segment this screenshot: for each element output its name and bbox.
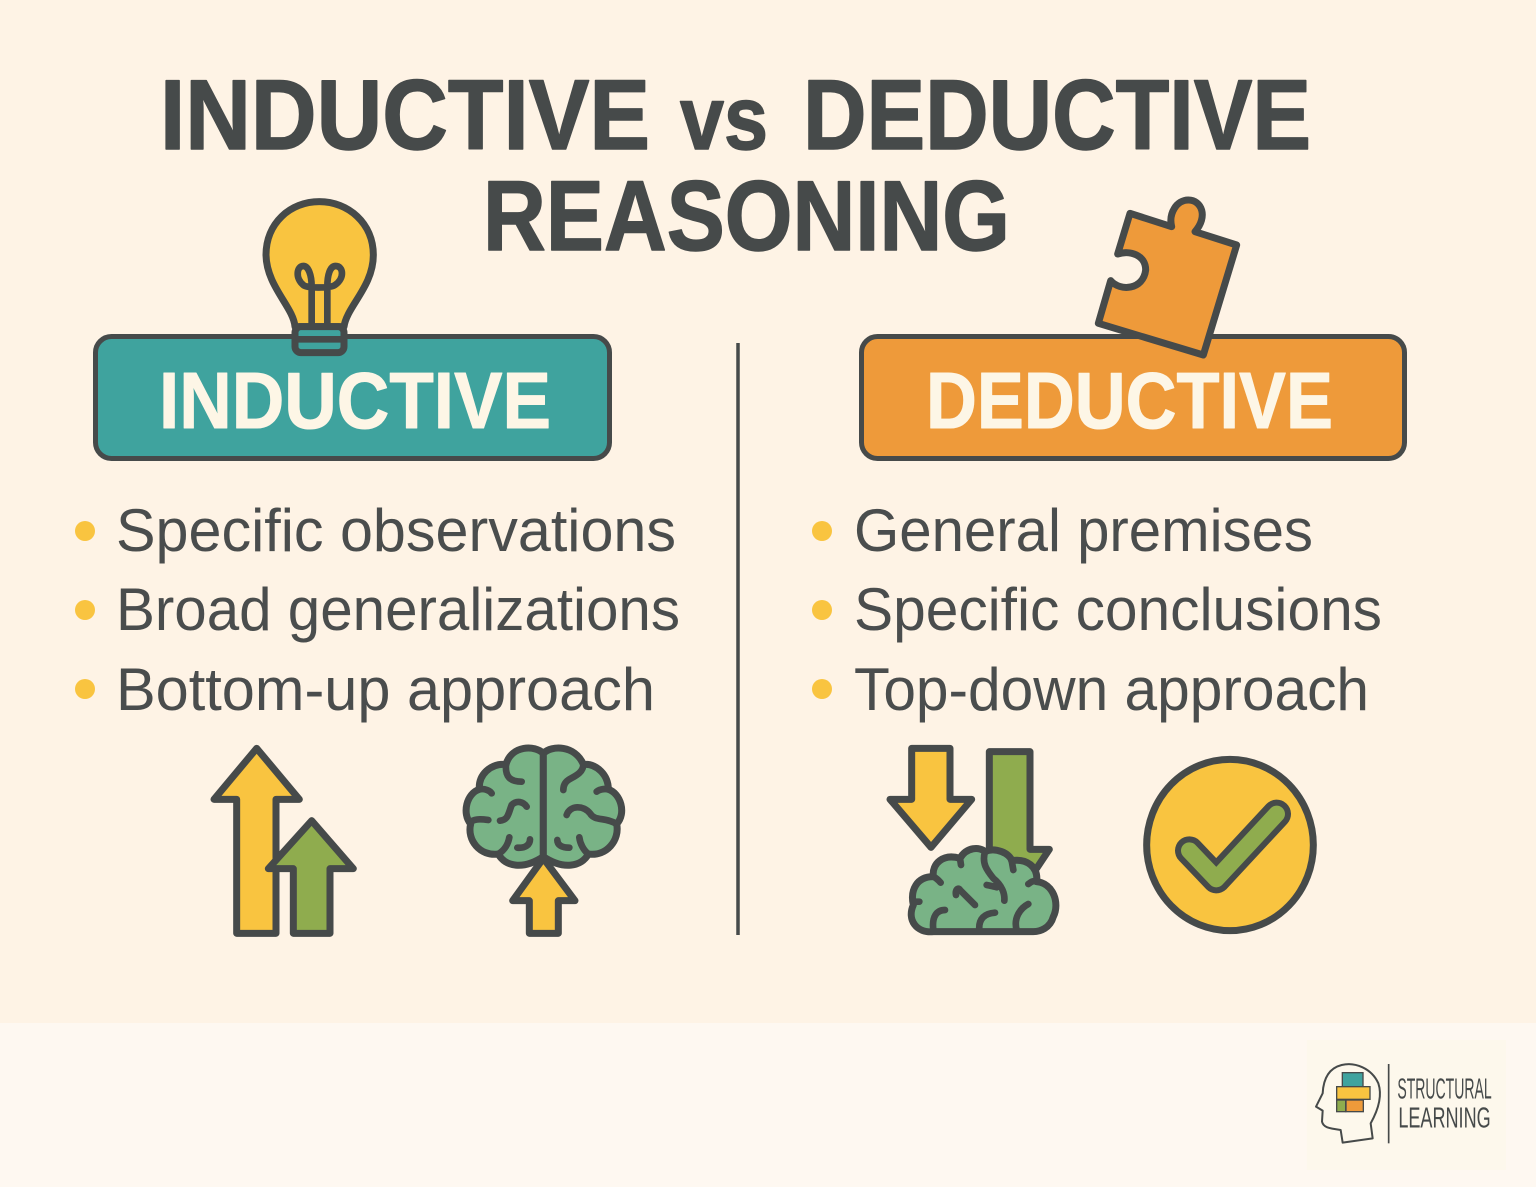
icon: downward arrows with brain (890, 748, 1056, 932)
inductive bullet list (75, 497, 680, 723)
inductive bullet list: Broad generalizations (116, 576, 680, 643)
title: vs (680, 69, 768, 169)
title (160, 59, 1311, 271)
icon: check mark circle (1147, 759, 1313, 931)
title: DEDUCTIVE (803, 59, 1311, 170)
deductive bullet list: General premises (854, 497, 1313, 564)
title: REASONING (483, 160, 1010, 271)
deductive bullet list (812, 497, 1382, 723)
inductive heading badge (96, 336, 610, 458)
icon: light bulb (266, 202, 373, 353)
title: INDUCTIVE (160, 59, 650, 170)
deductive bullet list: Specific conclusions (854, 576, 1382, 643)
logo: Structural Learning (1307, 1040, 1506, 1170)
inductive bullet list: Specific observations (116, 497, 676, 564)
deductive heading badge: DEDUCTIVE (926, 356, 1333, 445)
deductive bullet list: Top-down approach (854, 656, 1369, 723)
deductive heading badge (862, 336, 1404, 458)
panel: deductive (812, 200, 1404, 932)
inductive heading badge: INDUCTIVE (159, 356, 551, 445)
icon: brain with up arrow (466, 748, 622, 933)
icon: puzzle piece (1098, 200, 1237, 355)
inductive bullet list: Bottom-up approach (116, 656, 655, 723)
panel: inductive (75, 202, 680, 933)
icon: upward arrows (214, 748, 353, 933)
